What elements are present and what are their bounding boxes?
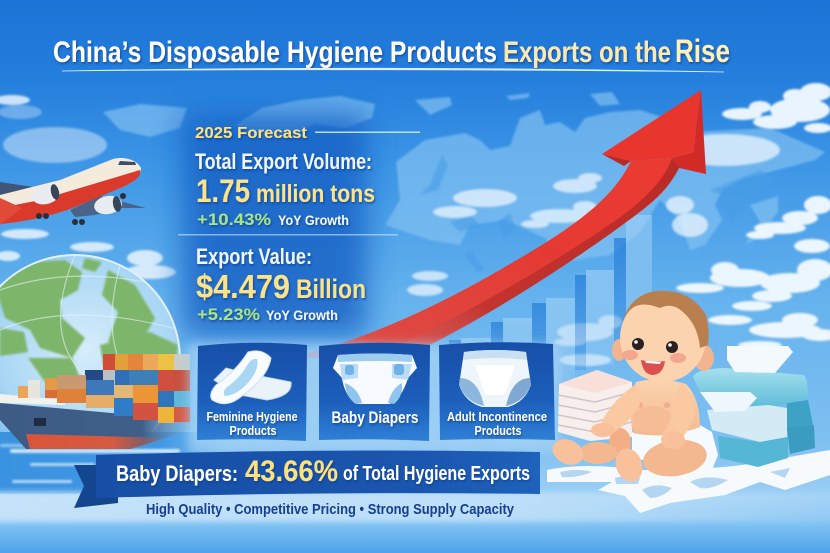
icon: adult pants <box>459 350 531 407</box>
tagline: High Quality • Competitive Pricing • Strong Supply Capacity <box>146 501 515 518</box>
clouds <box>0 83 830 390</box>
baby torso <box>630 379 700 435</box>
stat: export value: +5.23% <box>197 305 260 324</box>
card label: Baby Diapers <box>332 408 418 427</box>
baby arms <box>600 384 640 436</box>
title: China’s Disposable Hygiene Products <box>53 36 497 69</box>
stat: export value <box>196 244 366 324</box>
card label: Products <box>474 424 522 438</box>
baby left thigh <box>579 442 617 464</box>
stat: export value: Billion <box>296 274 366 304</box>
seas on map <box>420 155 775 272</box>
baby head <box>620 294 706 382</box>
banner: baby diapers share: 43.66% <box>245 455 338 488</box>
sea water <box>0 432 230 494</box>
stat: total export volume: YoY Growth <box>278 212 349 228</box>
title: Rise <box>675 33 730 69</box>
illustration: baby <box>548 291 718 485</box>
illustration: diaper stack <box>558 370 632 441</box>
card label <box>206 410 298 438</box>
stat: total export volume: million tons <box>256 180 375 208</box>
stat: export value: Export Value: <box>196 244 312 269</box>
title underline <box>62 68 724 72</box>
banner: baby diapers share: of Total Hygiene Exports <box>343 463 530 485</box>
card label: Adult Incontinence <box>447 410 547 424</box>
card label: Feminine Hygiene <box>206 410 298 424</box>
baby diaper <box>632 425 718 470</box>
illustration: globe <box>0 255 180 465</box>
illustration: blanket <box>547 450 830 513</box>
title: Exports on the <box>503 36 671 69</box>
card: baby diapers <box>319 343 430 441</box>
card halo <box>188 344 560 452</box>
card label: Products <box>230 424 277 438</box>
icon: baby diaper <box>333 354 417 404</box>
stat: total export volume: Total Export Volume: <box>195 149 372 174</box>
growth bars <box>449 215 652 388</box>
arrow: red growth arrow <box>287 90 706 358</box>
banner: baby diapers share <box>74 451 540 508</box>
icon: sanitary pad <box>211 351 291 404</box>
illustration: airplane <box>0 158 146 225</box>
banner: baby diapers share: Baby Diapers: <box>116 461 238 486</box>
baby face <box>622 338 686 375</box>
baby ears <box>612 339 626 361</box>
illustration: tissue boxes <box>693 346 815 467</box>
card: adult incontinence products <box>439 342 555 440</box>
world map backdrop <box>103 92 825 262</box>
illustration: container ship <box>0 354 190 449</box>
baby feet <box>548 434 588 470</box>
card: feminine hygiene products <box>197 343 307 441</box>
stat: export value: YoY Growth <box>266 307 338 323</box>
forecast rule <box>315 132 420 133</box>
stat: export value: $4.479 <box>196 268 290 305</box>
card label <box>447 410 547 438</box>
stat: total export volume: 1.75 <box>196 173 250 209</box>
stats: 2025 forecast: 2025 Forecast <box>195 125 308 142</box>
stats panel backdrop <box>182 114 367 336</box>
illustration: sea foam <box>0 444 180 483</box>
light band behind footer <box>0 492 830 522</box>
stats divider <box>178 234 398 236</box>
baby right thigh <box>641 436 709 480</box>
stat: total export volume <box>195 149 375 229</box>
baby inner knee <box>609 428 631 458</box>
stat: total export volume: +10.43% <box>197 210 271 229</box>
